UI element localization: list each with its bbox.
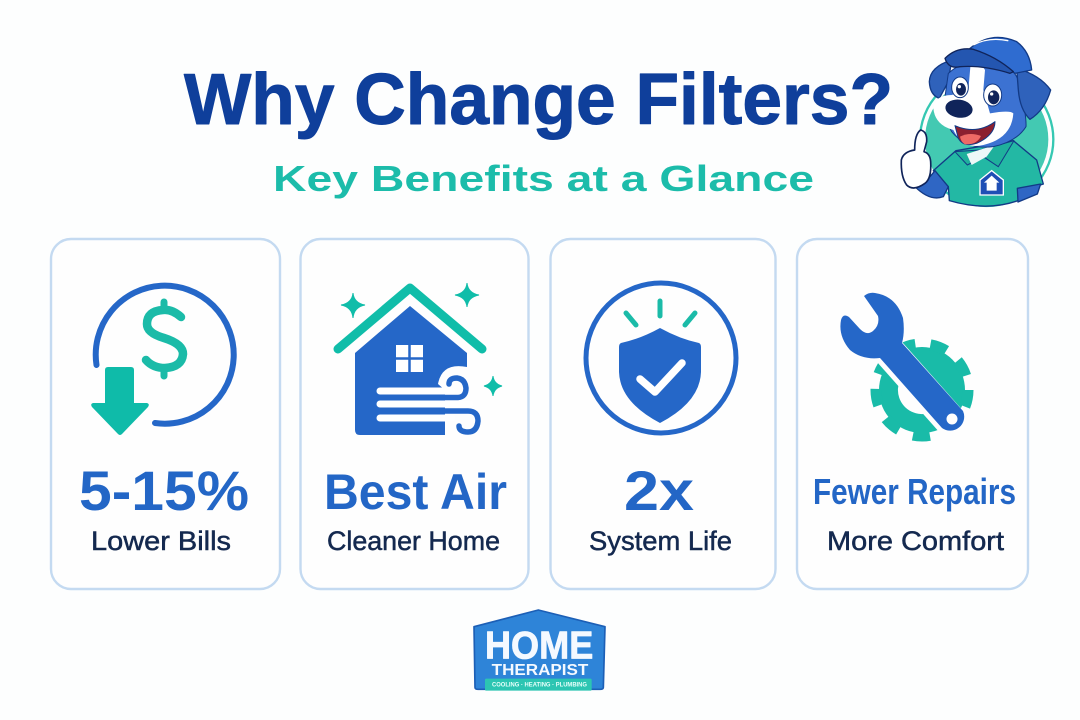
icon: shield in circle <box>586 283 736 433</box>
logo: home therapist: THERAPIST <box>492 662 589 679</box>
subtitle: Key Benefits at a Glance <box>273 158 814 199</box>
panel: best air <box>300 239 528 589</box>
logo: home therapist: HOME <box>485 624 593 668</box>
icon: clean air house <box>338 283 502 435</box>
stat: fewer repairs: Fewer Repairs <box>813 471 1016 512</box>
label: more comfort: More Comfort <box>827 526 1005 556</box>
label: cleaner home: Cleaner Home <box>327 526 500 556</box>
label: system life: System Life <box>589 526 732 556</box>
label: lower bills: Lower Bills <box>91 526 231 556</box>
panel: fewer repairs <box>797 239 1028 589</box>
panel: system life <box>550 239 776 589</box>
stat: 5-15%: 5-15% <box>79 459 249 522</box>
icon: falling dollar cost <box>91 286 234 435</box>
stat: best air: Best Air <box>324 464 507 520</box>
mascot: dog giving thumbs up <box>901 37 1053 206</box>
logo: home therapist: COOLING · HEATING · PLUMBING <box>492 681 587 688</box>
icon: wrench and gear <box>840 293 968 437</box>
logo: home therapist <box>474 610 605 691</box>
title: Why Change Filters? <box>184 60 893 140</box>
panel: lower bills <box>51 239 280 589</box>
stat: 2x: 2x <box>624 459 694 522</box>
